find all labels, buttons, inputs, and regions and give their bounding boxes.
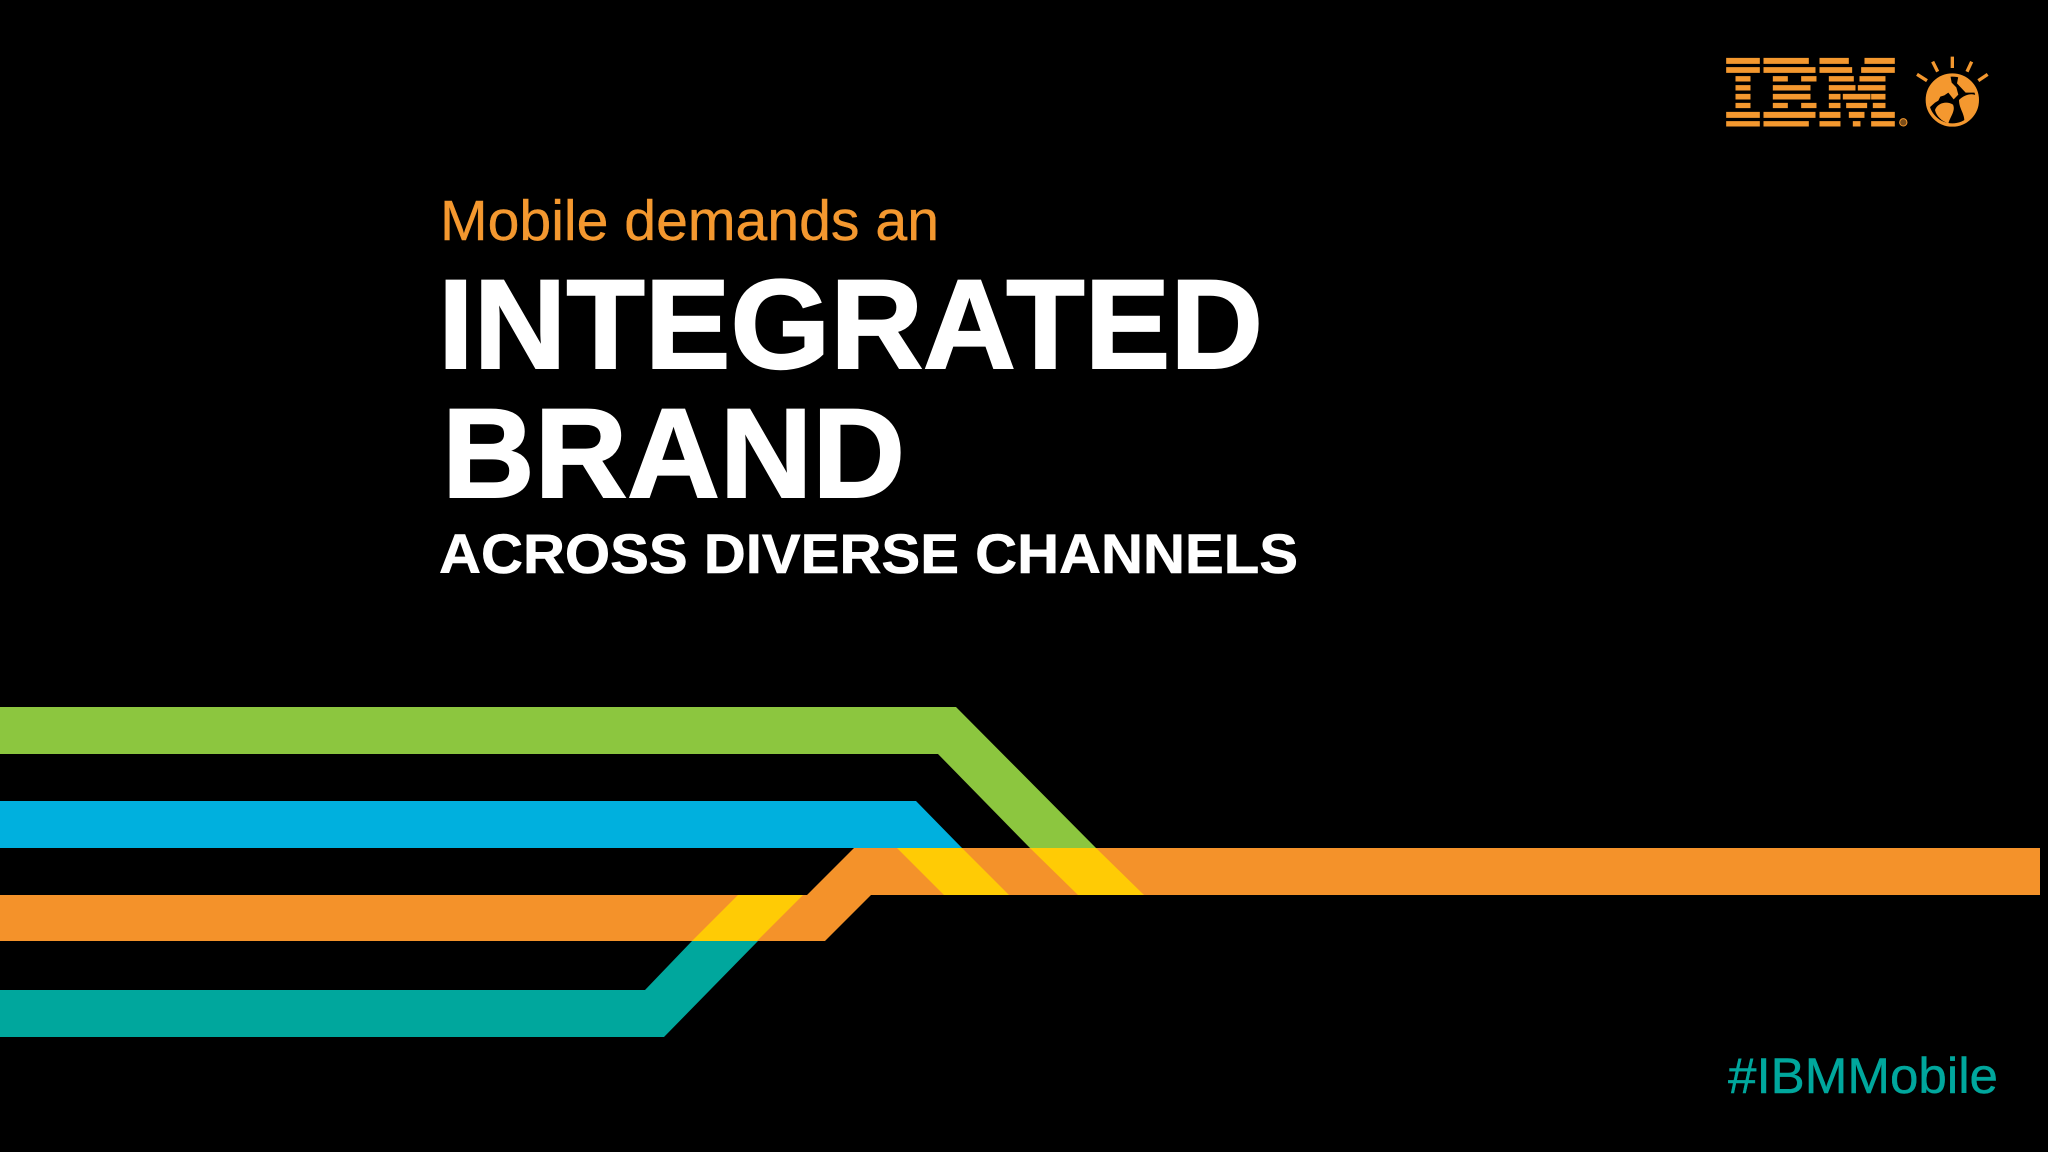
subheading: ACROSS DIVERSE CHANNELS: ACROSS DIVERSE CHANNELS <box>439 522 1298 585</box>
converging coloured bands <box>0 707 2040 1037</box>
overlap: yellow blue crossing <box>897 848 1009 895</box>
band: blue <box>0 801 962 848</box>
band: orange merged <box>0 848 2040 941</box>
logo globe and rays <box>1917 57 1988 125</box>
overlap: yellow green crossing <box>1030 848 1144 895</box>
headline: BRAND: BRAND <box>442 382 905 524</box>
subtitle: Mobile demands an: Mobile demands an <box>440 189 939 253</box>
IBM logo with globe <box>1727 57 1988 126</box>
logo wordmark: striped IBM <box>1727 58 1907 126</box>
band: green <box>0 707 1096 848</box>
hashtag: #IBMMobile <box>1728 1048 1998 1104</box>
headline: INTEGRATED: INTEGRATED <box>438 253 1263 395</box>
overlap: yellow teal crossing <box>692 895 803 941</box>
band: teal <box>0 941 758 1037</box>
